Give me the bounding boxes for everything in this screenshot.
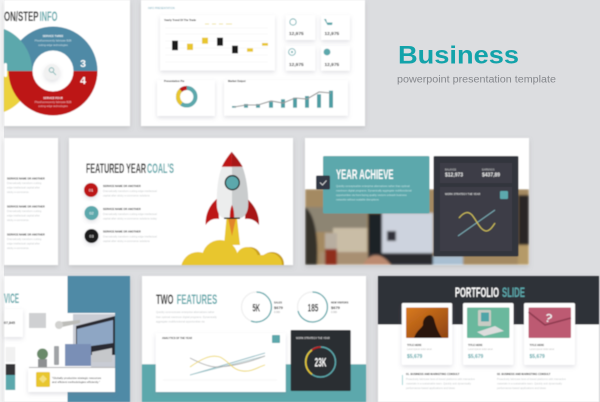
text column right: performance-based applications and ideas (497, 386, 547, 390)
text column right: 02. BUSINESS AND MARKETING CONSULT (497, 372, 551, 376)
ring stat 5k: $679 (274, 305, 284, 310)
goal 03: 03 (89, 234, 94, 238)
goal 03 (84, 229, 157, 243)
panel: service slide (4, 276, 130, 402)
color swatches (6, 347, 15, 390)
service item 1: edge intellectual capital after (7, 186, 40, 190)
line chart card: ANALYTICS OF THE YEAR (162, 337, 192, 340)
title: business: Business (398, 42, 519, 70)
bar and line chart: Market Output (228, 79, 246, 83)
service item 3: sticky e-commerce. (7, 246, 30, 250)
service item 1 (7, 176, 45, 194)
stat card: delivery (286, 15, 315, 40)
step number 3: 3 (80, 58, 86, 70)
heading: TWO (156, 291, 174, 307)
candlestick chart (160, 15, 275, 70)
ring stat 185: 185 (308, 302, 318, 314)
panel: portfolio slide (378, 276, 599, 402)
panel: dashboard slide (141, 0, 365, 126)
stat card: target (286, 46, 315, 71)
stat card: globe: 12,975 (324, 62, 340, 68)
teal text panel: YEAR ACHIEVE (336, 166, 394, 182)
text column left: performance-based applications and ideas (406, 386, 456, 390)
dark donut card (291, 330, 351, 391)
venn diagram: Phosfluorescently fabricate B2B (35, 38, 72, 42)
text column right: Proactively fabricate best-of-breed platforms with interactive (497, 377, 566, 381)
goal 01: 01 (89, 188, 94, 192)
text column left (402, 372, 475, 390)
service item 3: Dramatically transform cutting (7, 237, 42, 241)
ring stat 185 (298, 292, 349, 322)
service item 1: Dramatically transform cutting (7, 181, 42, 185)
heading: PORTFOLIO (455, 284, 499, 300)
goal 03: Dramatically transform cutting edge intellectual (103, 234, 157, 238)
venn diagram: SERVICE THREE (43, 34, 64, 38)
ring stat 5k: SALES (274, 302, 282, 304)
teal text panel: opportunities via front-facing quality vectors unleash business (336, 193, 407, 197)
description: Quickly communicate enterprise alternatives rather (156, 310, 215, 314)
service item 2: SERVICE NAME OR ANOTHER (7, 204, 45, 208)
heading accent: info: INFO (40, 8, 58, 24)
quote box: and efficient methodologies efficiently." (52, 380, 100, 384)
venn diagram: cutting-edge technologies (38, 43, 68, 47)
goal 01: SERVICE NAME OR ANOTHER (103, 184, 141, 188)
goal 01: Dramatically transform cutting edge intellectual (103, 189, 157, 193)
venn diagram: cutting-edge technologies (38, 104, 68, 108)
dark dashboard panel (434, 156, 518, 256)
illustration: rocket (181, 151, 285, 266)
goal 01 (84, 183, 157, 198)
stat card: target: 12,975 (289, 62, 304, 68)
service item 3: edge intellectual capital after (7, 242, 40, 246)
teal text panel (323, 156, 430, 214)
ring stat 5k: 5K (253, 302, 260, 314)
stat card: 07,845 (4, 321, 15, 325)
goal 02: capital after sticky e-commerce solutions today (103, 216, 157, 220)
ring stat 5k: 0.000 (274, 311, 281, 314)
photo: laptop on desk (305, 189, 529, 265)
dark dashboard panel: EARNINGS (482, 168, 495, 172)
dark dashboard panel: $12,973 (445, 172, 463, 178)
subtitle: powerpoint presentation template (397, 74, 556, 86)
text column left: 01. BUSINESS AND MARKETING CONSULT (406, 372, 460, 376)
heading accent: SLIDE (502, 284, 525, 300)
venn diagram: SERVICE FOUR (43, 96, 63, 100)
goal 02: 02 (89, 210, 94, 216)
portfolio card 1: $5,679 (407, 354, 423, 360)
portfolio card 1 (402, 303, 452, 365)
donut chart: Presentation Pie (164, 79, 185, 83)
panel: partial services slide (4, 138, 58, 265)
portfolio card 3: ? (543, 310, 554, 326)
teal text panel: Quickly conceptualize enterprise alternatives rather than optimal (336, 184, 410, 188)
portfolio card 3: $5,679 (530, 354, 545, 360)
check icon (316, 176, 330, 190)
dark dashboard panel: BALANCE (445, 168, 457, 172)
text column left: Proactively fabricate best-of-breed platforms with interactive (406, 377, 475, 381)
service item 2: sticky e-commerce. (7, 218, 30, 222)
line chart card (156, 333, 286, 392)
step number 4: 4 (80, 75, 86, 87)
panel: service slide: VICE (4, 290, 19, 306)
service item 2 (7, 204, 45, 222)
text column right: materials in a sustainable team. Quickly and dynamically (497, 382, 563, 386)
dark dashboard panel: WORK STRATEGY THE YEAR (445, 193, 480, 196)
service item 3: SERVICE NAME OR ANOTHER (7, 232, 45, 236)
heading: FEATURED YEAR (86, 160, 146, 176)
dark dashboard panel: $437,89 (482, 172, 500, 178)
portfolio card 1: Lorem ipsum dolor amet (407, 348, 432, 351)
portfolio card 2: Lorem ipsum dolor amet (468, 348, 493, 351)
text column left: materials in a sustainable team. Quickly and dynamically (406, 382, 472, 386)
portfolio card 2: $5,679 (468, 354, 484, 360)
panel: year achieve slide (305, 138, 529, 265)
goal 03: SERVICE NAME OR ANOTHER (103, 230, 141, 234)
ring stat 185: NEW VISITORS (331, 302, 349, 304)
heading accent: COAL'S (147, 160, 174, 176)
teal text panel: maximum digital programs. Dynamically aggregate multifunctional (336, 188, 412, 192)
ring stat 5k (242, 292, 284, 322)
portfolio card 2: TITLE HERE (468, 344, 483, 347)
stat card: delivery: 12,975 (289, 31, 304, 37)
ring stat 185: $679 (331, 305, 341, 310)
description (156, 310, 217, 324)
goal 02: Dramatically transform cutting edge intellectual (103, 212, 157, 216)
ring stat 185: 0.000 (331, 311, 338, 314)
description: than optimal maximum digital programs. Dynamically (156, 315, 217, 319)
panel: two features slide (142, 276, 366, 402)
dark donut card: 23K (315, 356, 327, 370)
bar and line chart (224, 79, 348, 116)
portfolio card 3 (524, 303, 575, 365)
photo: desk setup (28, 313, 115, 368)
goal 03: capital after sticky e-commerce solutions (103, 239, 150, 243)
stat card: shopping (321, 15, 350, 40)
goal 01: capital after sticky e-commerce solutions (103, 194, 150, 198)
teal text panel: networks without scalable disruptions (336, 198, 380, 202)
slide label: INFO PRESENTATION (148, 6, 175, 10)
stat card: globe (321, 46, 350, 71)
text column right (497, 372, 566, 390)
goal 02: SERVICE NAME OR ANOTHER (103, 207, 141, 211)
dark donut card: WORK STRATEGY THE YEAR (296, 337, 330, 340)
stat card: shopping: 12,975 (324, 31, 340, 37)
portfolio card 2 (463, 303, 514, 365)
service item 1: sticky e-commerce. (7, 190, 30, 194)
portfolio card 1: TITLE HERE (407, 344, 422, 347)
portfolio card 3: Lorem ipsum dolor amet (530, 348, 555, 351)
candlestick chart: Yearly Trend Of The Trade (164, 18, 197, 22)
heading: step info: ON/STEP (4, 8, 38, 24)
panel: step info slide (4, 0, 130, 126)
description: aggregate multifunctional opportunities via (156, 320, 205, 324)
service item 2: Dramatically transform cutting (7, 209, 42, 213)
panel: featured year goals slide (68, 138, 294, 268)
venn diagram: Phosfluorescently fabricate B2B (35, 100, 72, 104)
donut chart (157, 79, 215, 116)
service item 2: edge intellectual capital after (7, 214, 40, 218)
portfolio card 3: TITLE HERE (530, 344, 544, 347)
venn diagram (4, 26, 98, 116)
quote box (28, 368, 115, 392)
heading accent: FEATURES (177, 291, 217, 307)
goal 02 (84, 206, 157, 220)
quote box: "Globally productize strategic resources (52, 376, 102, 380)
service item 3 (7, 232, 45, 250)
service item 1: SERVICE NAME OR ANOTHER (7, 176, 45, 180)
